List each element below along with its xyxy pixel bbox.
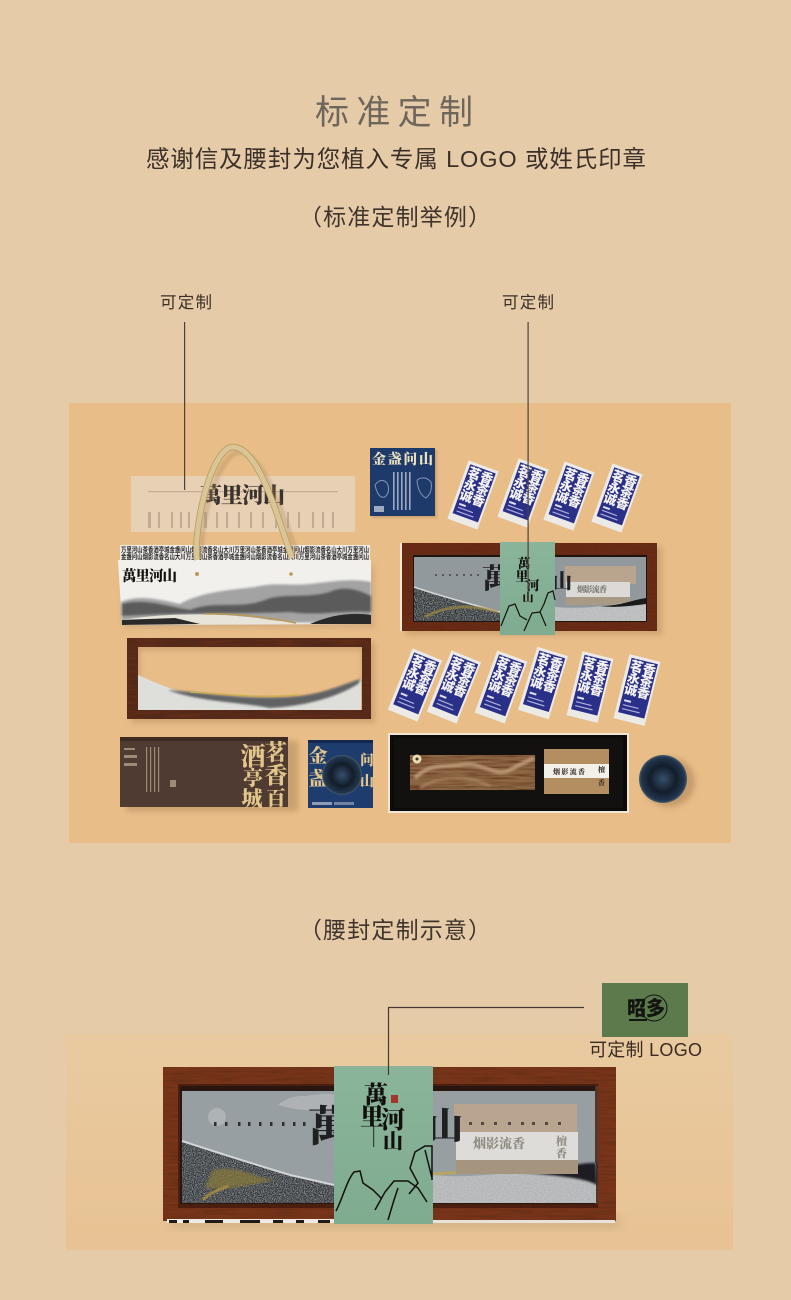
green band with title and mountains: 山 xyxy=(522,589,534,605)
band calligraphy: 河 xyxy=(381,1100,405,1135)
tea packets, lower row: 永茶 xyxy=(626,670,654,690)
band mountains xyxy=(336,1146,432,1220)
tea packets, lower row: 诚香 xyxy=(576,678,605,699)
tea packets, lower row: 永茶 xyxy=(490,666,520,689)
tea packets, top row: 诚香 xyxy=(601,490,631,513)
tea packets, lower row: 茗香 xyxy=(581,655,610,676)
kraft incense card: 香 xyxy=(598,778,605,788)
wooden frame close-up: 萬 xyxy=(308,1094,350,1154)
bag handles: gold ribbon xyxy=(196,447,297,560)
tea packets, top row: 茗香 xyxy=(516,462,545,485)
tea packets, top row: 永茶 xyxy=(512,474,541,497)
tea packets, top row: 永茶 xyxy=(606,479,635,502)
gift bag: 万里河山茶香酒亭城金盏问山烟影流香名山大川万里河山茶香酒亭城金盏问山烟影流香名山大川万里河山 xyxy=(121,545,369,554)
tea packets, top row: 茗香 xyxy=(562,465,591,488)
band calligraphy: 里 xyxy=(360,1097,384,1132)
letter card behind glass: 烟影流香 xyxy=(472,1133,525,1152)
tea packets, lower row: 茗香 xyxy=(409,652,439,676)
tea packets, lower row: 永茶 xyxy=(444,666,473,689)
panel: band close-up xyxy=(66,1034,733,1250)
navy box with bowl: 金 xyxy=(308,741,328,768)
letter card behind glass: 香 xyxy=(556,1145,567,1161)
tea packets, lower row: 永茶 xyxy=(579,667,607,687)
thank-you letter: 萬里河山 xyxy=(200,479,285,510)
section heading: standard customization example: （标准定制举例） xyxy=(299,204,491,230)
customizable logo swatch: 昭多 xyxy=(627,996,665,1020)
empty wooden frame with sand landscape xyxy=(127,638,375,723)
wooden sand-art box with green band xyxy=(400,542,662,635)
subtitle: 感谢信及腰封为您植入专属 LOGO 或姓氏印章 xyxy=(146,146,646,172)
tea packets, lower row: 永茶 xyxy=(405,664,434,687)
panel: product flat lay xyxy=(69,403,731,843)
green belly band xyxy=(334,1066,433,1224)
letter card behind glass xyxy=(454,1104,578,1174)
kraft incense card xyxy=(544,749,609,794)
gift bag: 金盏问山烟影流香名山大川万里河山茶香酒亭城金盏问山烟影流香名山大川万里河山茶香酒亭城金盏问山 xyxy=(121,552,369,561)
navy box with bowl xyxy=(308,740,374,808)
tea packets, lower row: 诚香 xyxy=(439,677,469,700)
callout line: letter xyxy=(184,322,185,490)
tea packets, top row: 永茶 xyxy=(558,477,587,500)
logo caption: 可定制 LOGO xyxy=(589,1040,702,1060)
callout label: customizable letter: 可定制 xyxy=(160,293,212,312)
tea packets, top row: 茗香 xyxy=(466,464,495,487)
tea packets, lower row xyxy=(388,647,661,726)
section heading: band customization: （腰封定制示意） xyxy=(299,917,491,943)
green band with title and mountains: 里 xyxy=(515,566,529,585)
incense holder carving xyxy=(410,754,535,790)
tea packets, top row: 诚香 xyxy=(457,487,487,510)
tea packets, lower row: 茗香 xyxy=(448,654,478,678)
green band with title and mountains xyxy=(500,542,555,635)
wooden sand-art box with green band: 萬 xyxy=(482,557,510,597)
customizable logo swatch xyxy=(602,983,688,1037)
green band with title and mountains: 萬 xyxy=(517,553,531,572)
wooden sand-art box with green band: 山 xyxy=(552,565,572,594)
wooden frame close-up: 山 xyxy=(427,1098,463,1149)
tea packets, lower row: 诚香 xyxy=(486,677,516,700)
brown tea box with gold calligraphy: 茗 xyxy=(265,736,287,767)
title: 标准定制 xyxy=(315,94,473,132)
tea packets, lower row: 诚香 xyxy=(400,675,430,698)
band calligraphy: 山 xyxy=(383,1125,403,1154)
kraft incense card: 檀 xyxy=(598,765,605,775)
black gift tray xyxy=(388,733,629,813)
navy box with bowl: 盏 xyxy=(308,764,328,791)
navy booklet: 金盏问山 xyxy=(372,449,433,469)
icon: tea bowl xyxy=(322,755,362,795)
tea bowl xyxy=(639,755,695,807)
band calligraphy: 萬 xyxy=(364,1075,388,1110)
navy box with bowl: 山 xyxy=(360,771,374,791)
navy box with bowl: 问 xyxy=(360,750,374,770)
tea packets, lower row: 诚香 xyxy=(528,674,558,696)
tea packets, lower row: 永茶 xyxy=(532,662,561,684)
brown tea box with gold calligraphy xyxy=(120,736,298,813)
callout label: customizable band: 可定制 xyxy=(502,293,554,312)
gift bag: 萬里河山 xyxy=(122,565,177,586)
wooden sand-art box with green band: 烟影流香 xyxy=(576,584,607,595)
tea packets, lower row: 诚香 xyxy=(623,681,652,702)
brown tea box with gold calligraphy: 亭 xyxy=(243,762,263,791)
sand: light right xyxy=(433,1163,596,1203)
callout line: band xyxy=(528,322,529,601)
brown tea box with gold calligraphy: 酒 xyxy=(240,737,266,773)
brown tea box with gold calligraphy: 城 xyxy=(242,783,262,813)
brown tea box with gold calligraphy: 香 xyxy=(264,757,288,790)
band calligraphy xyxy=(360,1075,405,1154)
tea packets, top row: 永茶 xyxy=(462,476,491,499)
tea packets, top row: 茗香 xyxy=(610,467,639,490)
navy booklet xyxy=(370,448,437,518)
tea packets, lower row: 茗香 xyxy=(494,655,524,678)
thank-you letter xyxy=(131,476,355,532)
callout line to band logo xyxy=(388,1008,584,1075)
wooden frame close-up xyxy=(163,1067,616,1223)
tea packets, top row: 诚香 xyxy=(553,488,583,511)
letter card behind glass: 檀 xyxy=(556,1133,567,1149)
tea packets, top row xyxy=(447,458,643,533)
tea packets, top row: 诚香 xyxy=(507,485,537,508)
brown tea box with gold calligraphy: 百 xyxy=(266,782,286,811)
tea packets, lower row: 茗香 xyxy=(535,651,565,673)
kraft incense card: 烟影流香 xyxy=(552,767,585,777)
gift bag xyxy=(118,545,375,628)
green band with title and mountains: 河 xyxy=(526,575,540,594)
tea packets, lower row: 茗香 xyxy=(628,658,657,679)
sand: dark left xyxy=(182,1141,334,1203)
